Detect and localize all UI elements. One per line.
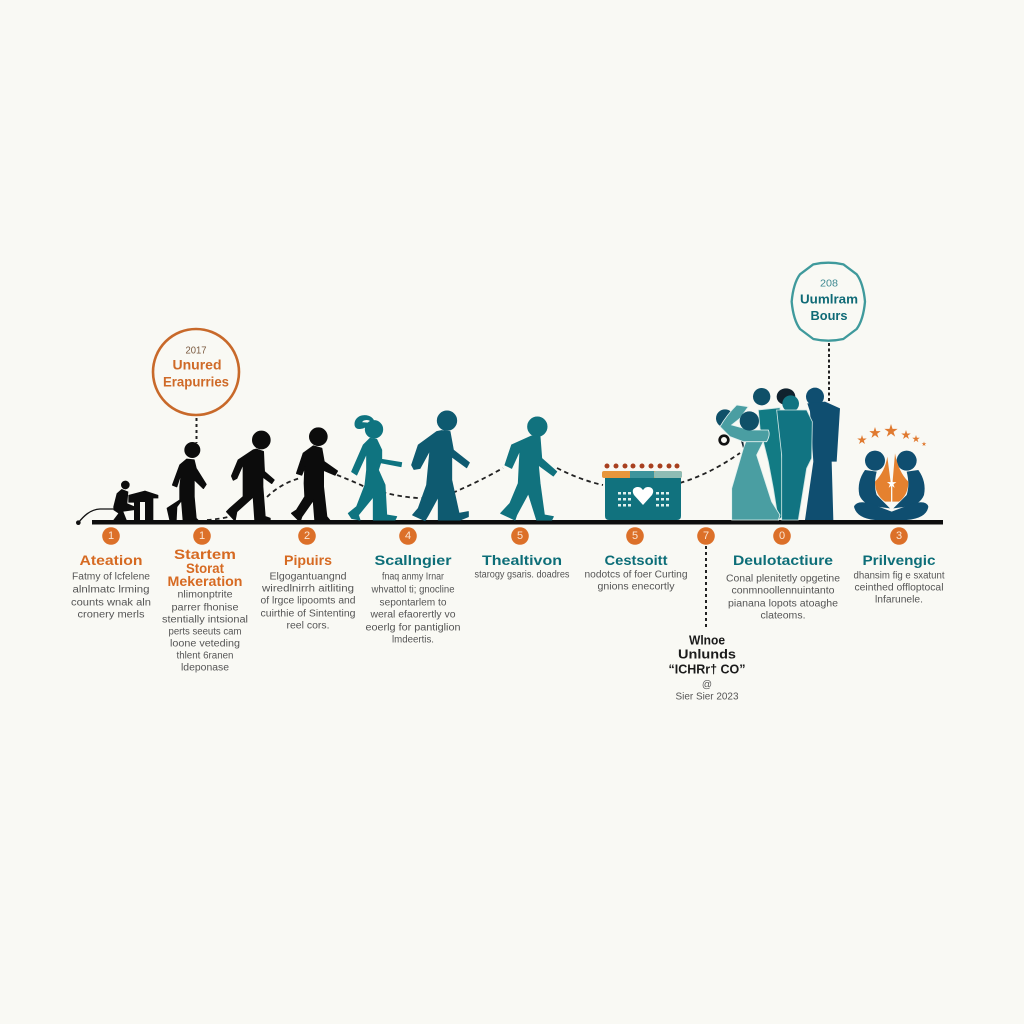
icon: walking figure 3 [292,428,337,522]
step 1: Ateation: counts wnak aln [71,598,151,608]
meditating figures [854,451,928,520]
step 6: Cestsoitt: nodotcs of foer Curting [584,570,688,580]
step 5: Thealtivon: Thealtivon [482,552,562,568]
step 9: Prilvengic: ceinthed offloptocal [854,582,944,594]
callout: Wlnoe Unlunds: Wlnoe [689,632,725,648]
dotted connector: 2017 [196,418,198,443]
icon: dark teal figure walking [412,411,469,521]
step 5: Thealtivon [474,527,570,580]
icon: group of people [716,388,840,520]
step 8: Deulotactiure: conmnoollennuintanto [732,586,835,596]
step 5: Thealtivon: starogy gsaris. doadres [474,570,570,580]
step 4: Scallngier: eoerlg for pantiglion [366,622,460,634]
step 9: Prilvengic [854,527,945,606]
callout: teal octagonal circle: Uumlram [800,292,858,306]
step 3: Pipuirs: Pipuirs [284,552,332,568]
callout: teal octagonal circle [792,263,865,341]
step 7 badge and dotted connector: 7 [703,530,709,542]
callout: 2017 circle [153,329,239,415]
step 4: Scallngier [366,527,460,646]
step 6: Cestsoitt: gnions enecortly [598,582,674,592]
step 2: Startem Storat Mekeration: thlent 6ranen [176,650,234,662]
callout: 2017 circle: Unured [172,358,222,372]
dotted connector: teal callout [828,343,830,402]
step 3: Pipuirs [260,527,356,632]
step 8: Deulotactiure [726,527,840,622]
step 5: Thealtivon: 5 [517,530,523,542]
step 1: Ateation [71,527,151,620]
step 1: Ateation: Ateation [80,552,142,568]
step 2: Startem Storat Mekeration: nlimonptrite [178,590,233,600]
icon: walking figure 1 [167,443,206,521]
callout: Wlnoe Unlunds: Sier Sier 2023 [676,692,739,702]
step 1: Ateation: 1 [108,530,114,542]
step 9: Prilvengic: 3 [896,530,902,542]
step 2: Startem Storat Mekeration: loone veteding [170,638,240,650]
step 9: Prilvengic: lnfarunele. [875,594,923,606]
step 9: Prilvengic: dhansim fig e sxatunt [854,570,945,582]
callout: teal octagonal circle: Bours [810,308,848,323]
step 4: Scallngier: whvattol ti; gnocline [371,584,455,596]
step 2: Startem Storat Mekeration: parrer fhonise [172,602,239,614]
step 2: Startem Storat Mekeration [162,527,248,674]
step 2: Startem Storat Mekeration: stentially intsional [162,614,248,626]
step 3: Pipuirs: cuirthie of Sintenting [260,608,356,620]
stars [857,424,926,446]
step 4: Scallngier: fnaq anmy Irnar [382,572,445,582]
timeline baseline [92,520,943,524]
step 8: Deulotactiure: Deulotactiure [733,552,833,568]
step 3: Pipuirs: of lrgce lipoomts and [260,596,356,606]
step 2: Startem Storat Mekeration: Startem [174,546,236,562]
callout: Wlnoe Unlunds: @ [702,680,712,690]
step 4: Scallngier: lmdeertis. [392,634,434,646]
callout: Wlnoe Unlunds [668,632,746,702]
step 2: Startem Storat Mekeration: Mekeration [168,573,242,589]
icon: teal figure walking [501,417,557,520]
step 1: Ateation: Fatmy of lcfelene [72,572,150,582]
icon: walking figure 2 [227,431,274,521]
dashed journey path [207,453,740,520]
icon: teal woman walking [348,416,402,520]
callout: Wlnoe Unlunds: “ICHRr† CO” [668,662,746,676]
icon: seated person at desk [76,481,158,525]
step 3: Pipuirs: reel cors. [286,620,330,632]
step 9: Prilvengic: Prilvengic [862,552,936,568]
step 1: Ateation: alnlmatc lrming [72,584,150,596]
step 8: Deulotactiure: 0 [779,530,785,542]
step 6: Cestsoitt: 5 [632,530,638,542]
step 2: Startem Storat Mekeration: Storat [186,560,224,576]
step 4: Scallngier: 4 [405,530,411,542]
step 3: Pipuirs: Elgogantuangnd [270,572,346,582]
step 8: Deulotactiure: Conal plenitetly opgetine [726,574,840,584]
step 2: Startem Storat Mekeration: perts seeuts cam [168,626,242,638]
step 2: Startem Storat Mekeration: ldeponase [181,662,229,674]
icon: meditating pair with flame and stars [854,424,928,520]
step 4: Scallngier: Scallngier [374,552,452,568]
step 2: Startem Storat Mekeration: 1 [199,530,205,542]
step 6: Cestsoitt: Cestsoitt [604,552,668,568]
step 6: Cestsoitt [584,527,688,592]
step 3: Pipuirs: wiredlnirrh aitliting [261,584,354,594]
callout: teal octagonal circle: 208 [820,278,838,290]
step 4: Scallngier: weral efaorertly vo [369,610,456,620]
step 1: Ateation: cronery merls [78,610,144,620]
step 4: Scallngier: sepontarlem to [380,598,447,608]
callout: 2017 circle: Erapurries [163,374,229,390]
callout: Wlnoe Unlunds: Unlunds [678,646,736,662]
callout: 2017 circle: 2017 [186,346,207,356]
icon: heart box with candles [602,464,682,520]
step 7 badge and dotted connector [697,527,715,629]
step 3: Pipuirs: 2 [304,530,310,542]
step 8: Deulotactiure: pianana lopots atoaghe [728,598,838,610]
step 8: Deulotactiure: clateoms. [760,610,806,622]
